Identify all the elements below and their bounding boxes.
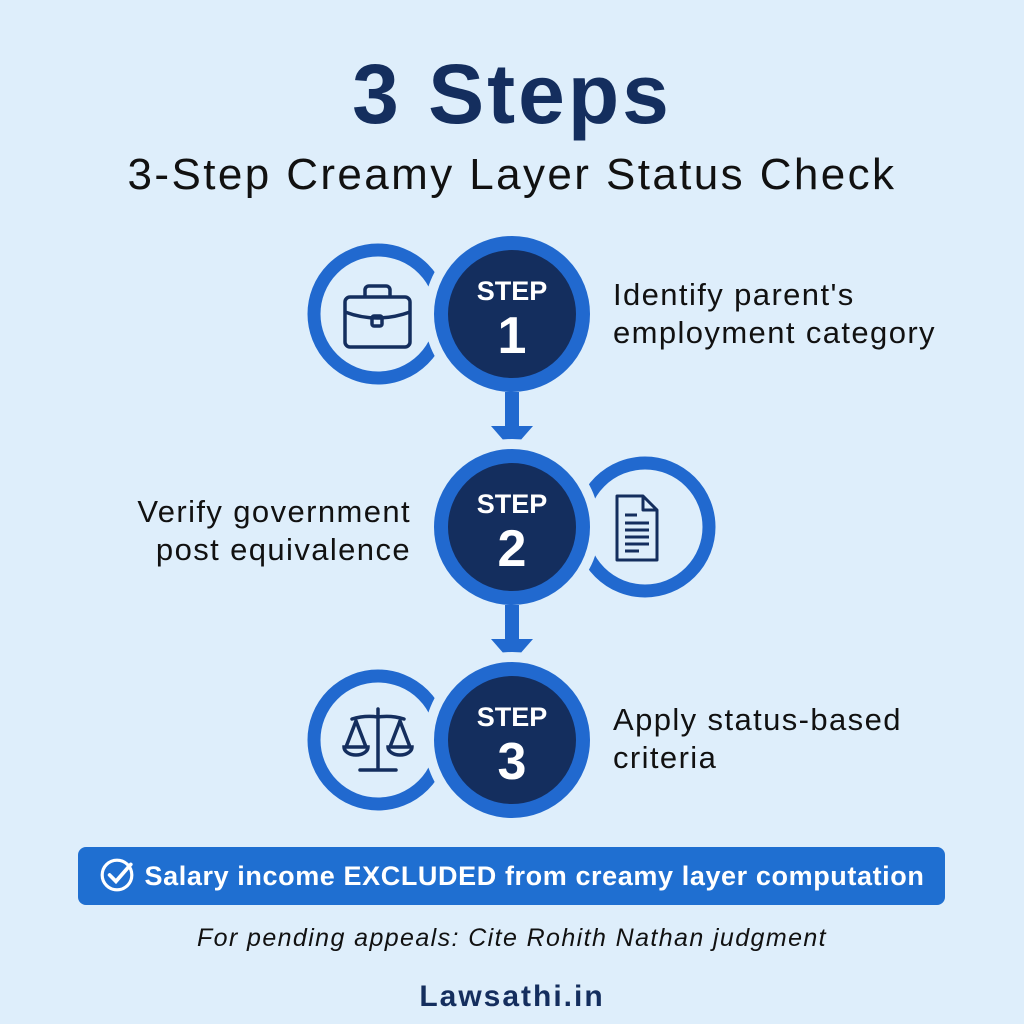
step 1: STEP [477,276,547,306]
banner [78,847,945,905]
subtitle: 3-Step Creamy Layer Status Check [128,150,896,199]
label step 3: Apply status-based [613,702,902,737]
icon circle: document [424,439,709,615]
footer brand: Lawsathi.in [419,980,605,1013]
label step 1: employment category [613,315,936,350]
label step 2 [137,494,411,567]
icon circle: briefcase [314,226,600,402]
step 1: 1 [498,307,526,365]
label step 3: criteria [613,740,717,775]
step 3: STEP [477,702,547,732]
banner: Salary income EXCLUDED from creamy layer computation [145,861,924,891]
step 3 [314,652,600,828]
label step 1 [613,277,936,350]
step 2: 2 [498,520,526,578]
label step 2: post equivalence [156,532,411,567]
icon circle: scales [314,652,600,828]
icon: check [100,858,134,892]
arrow 1 [491,392,533,450]
step 2: STEP [477,489,547,519]
step 1 [314,226,600,402]
title: 3 Steps [352,47,672,141]
step 3: 3 [498,733,526,791]
label step 3 [613,702,902,775]
step 2 [424,439,709,615]
label step 2: Verify government [137,494,411,529]
note: For pending appeals: Cite Rohith Nathan judgment [197,924,827,952]
arrow 2 [491,605,533,663]
label step 1: Identify parent's [613,277,855,312]
